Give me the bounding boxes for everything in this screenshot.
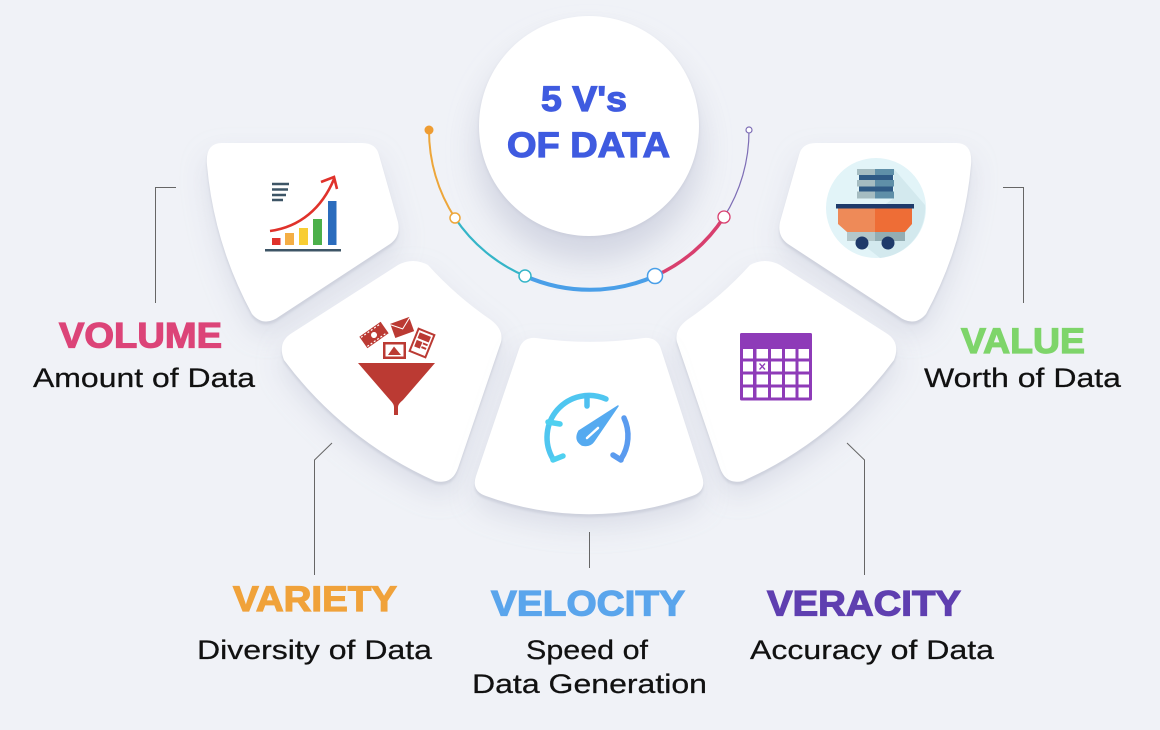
label: variety	[197, 579, 432, 665]
label: volume	[33, 316, 255, 393]
leader line: variety	[314, 443, 332, 575]
leader line: veracity	[847, 443, 864, 575]
title: 5 V's	[541, 79, 627, 119]
arc timeline	[424, 126, 752, 290]
icon: calendar	[740, 333, 812, 400]
label: veracity: Accuracy of Data	[750, 635, 994, 665]
leader line: value	[1003, 188, 1024, 303]
label: volume: VOLUME	[59, 316, 222, 356]
panel: variety card	[282, 261, 502, 482]
leader line: volume	[156, 188, 176, 303]
label: veracity: VERACITY	[767, 584, 961, 624]
icon: data funnel	[358, 317, 436, 415]
panel: volume card	[207, 143, 399, 322]
label: value: VALUE	[961, 321, 1085, 361]
label: variety: Diversity of Data	[197, 635, 432, 665]
panel: value card	[779, 143, 971, 322]
label: velocity: VELOCITY	[491, 584, 685, 624]
panel: velocity card	[475, 338, 703, 514]
label: value	[924, 321, 1121, 393]
label: velocity: Speed of	[526, 635, 649, 665]
icon: growth bar chart	[265, 177, 341, 252]
title: OF DATA	[507, 125, 670, 165]
label: veracity	[750, 584, 994, 665]
label: value: Worth of Data	[924, 363, 1121, 393]
label: velocity: Data Generation	[472, 669, 707, 699]
label: velocity	[472, 584, 707, 699]
icon: speedometer	[547, 395, 628, 460]
icon: mining cart	[826, 158, 926, 258]
panel: veracity card	[676, 261, 896, 482]
title	[507, 79, 670, 165]
leader line: velocity	[588, 532, 590, 568]
label: variety: VARIETY	[233, 579, 397, 619]
label: volume: Amount of Data	[33, 363, 255, 393]
central circle	[479, 16, 699, 236]
